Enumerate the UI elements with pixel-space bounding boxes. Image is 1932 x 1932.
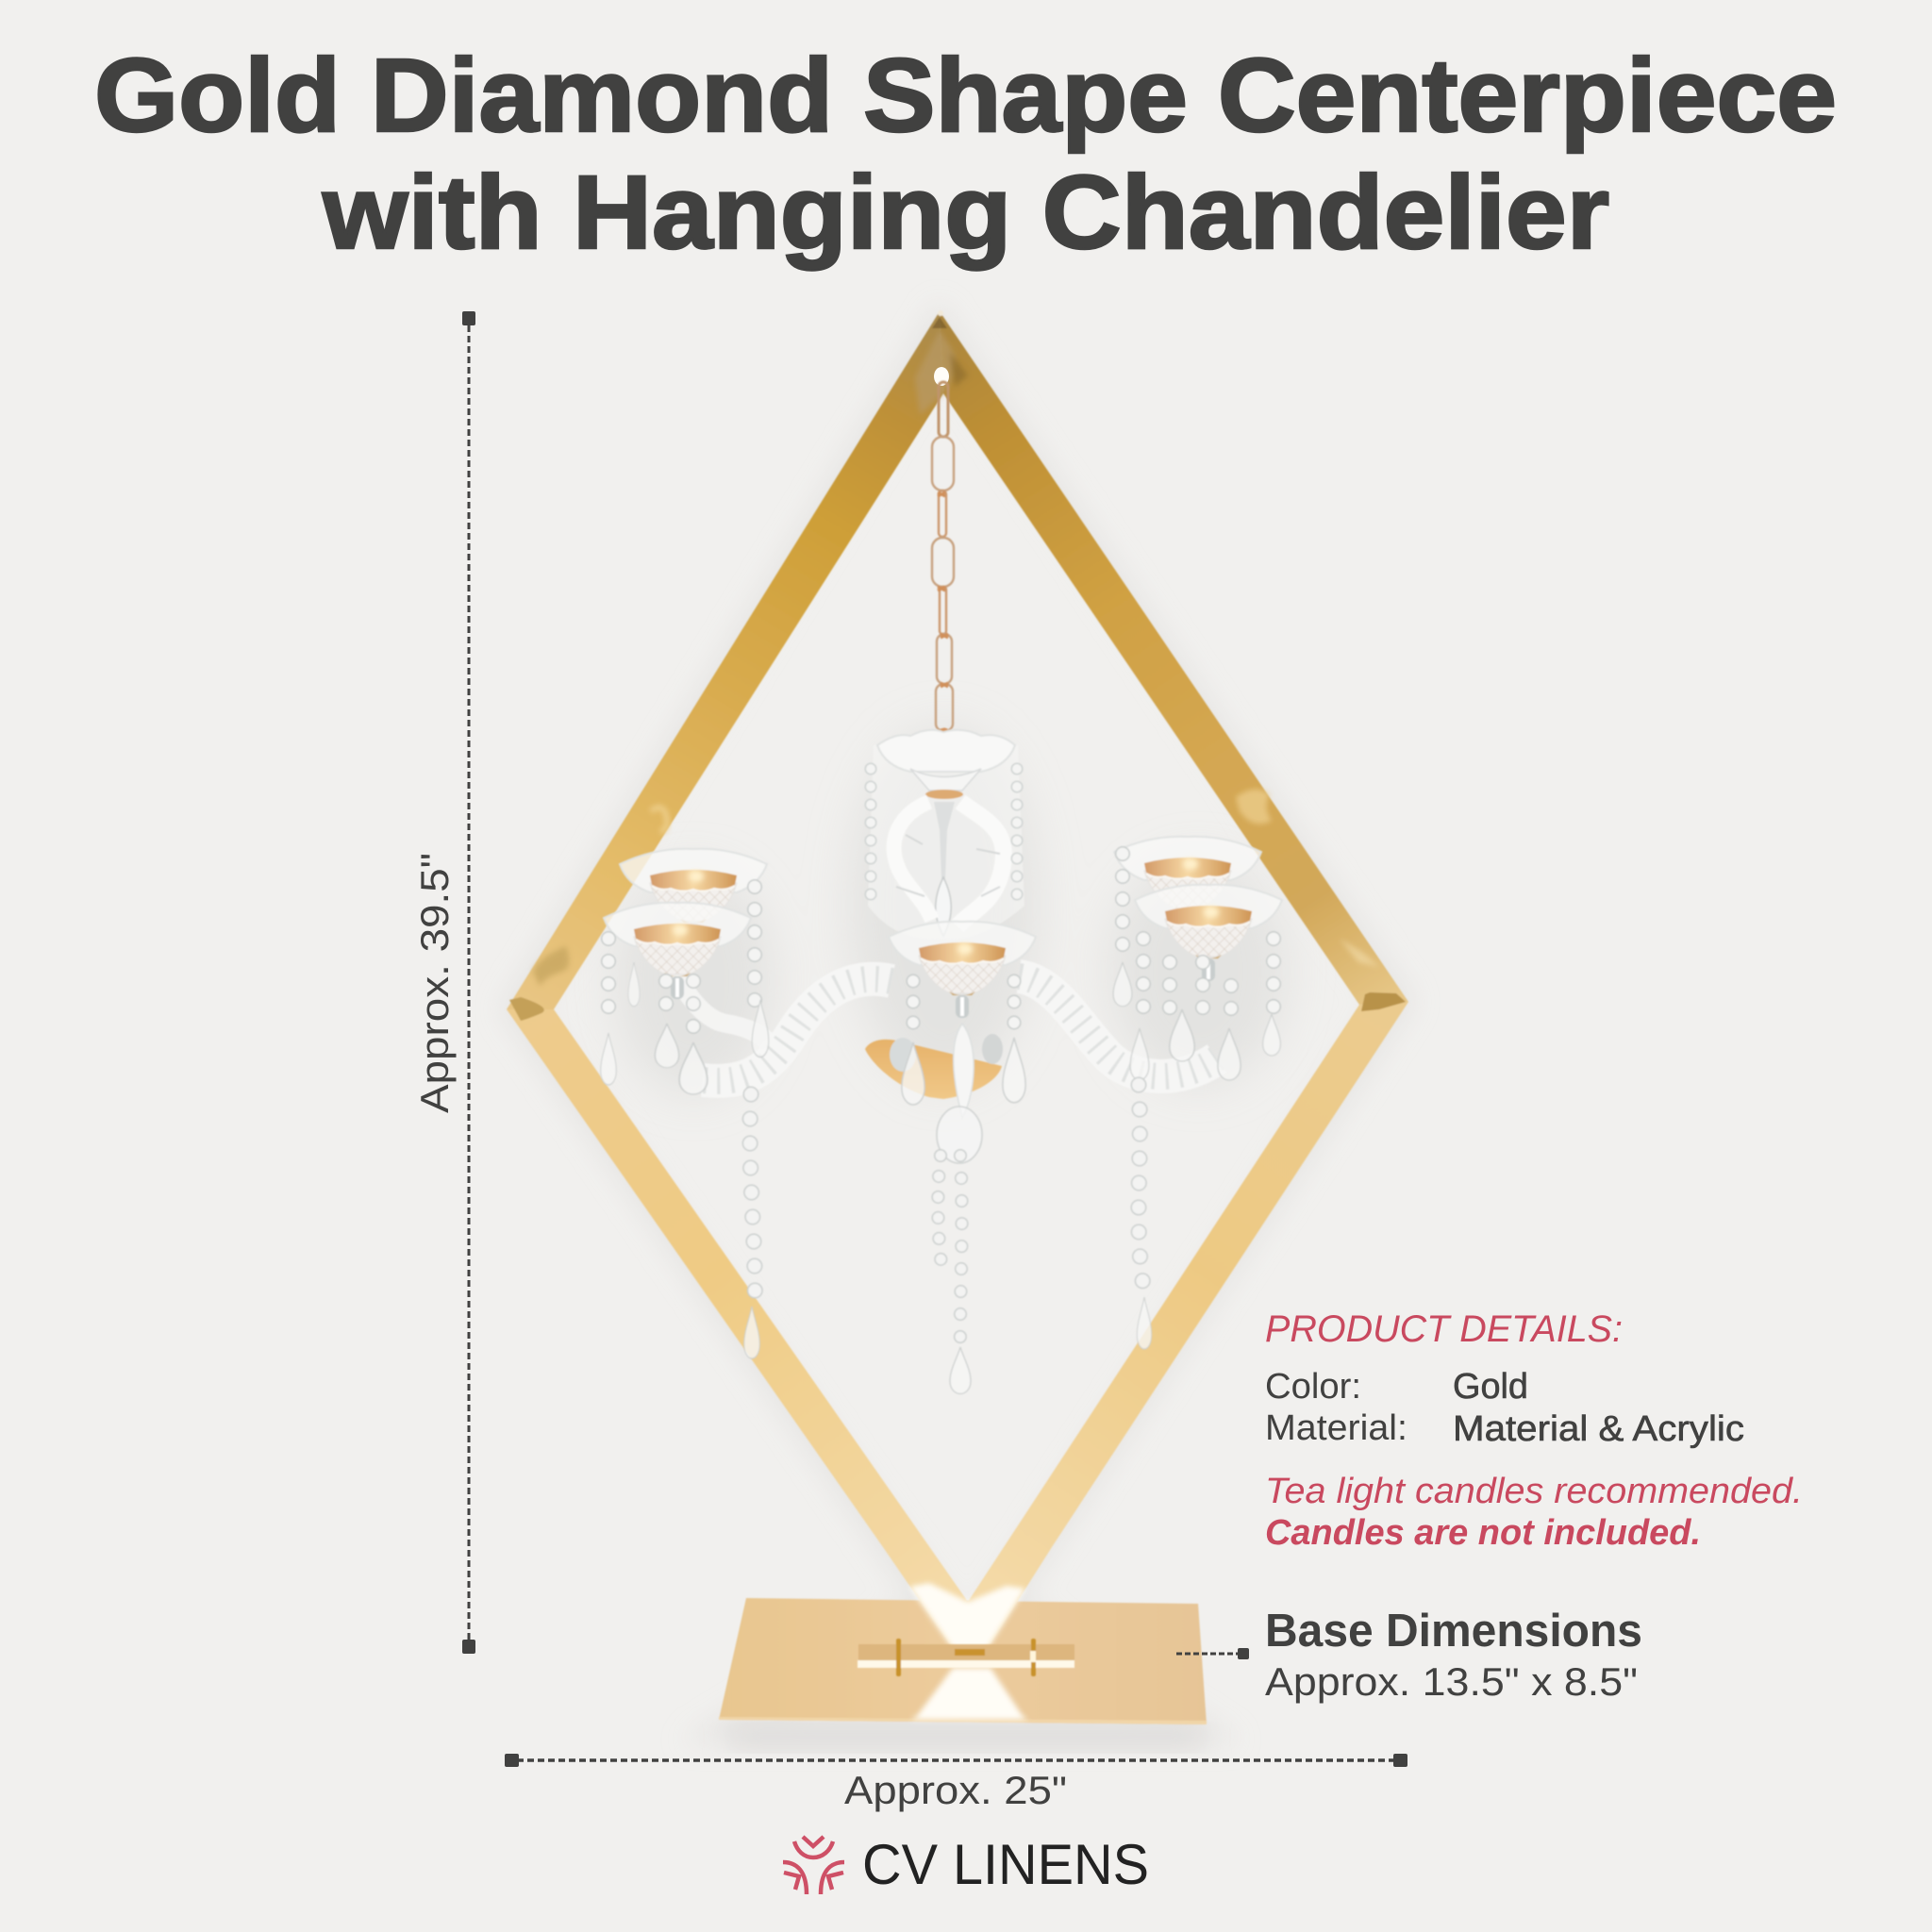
- lower left strip: [507, 1009, 985, 1653]
- brand logo: [783, 1833, 1149, 1896]
- spec rows: Material:: [1265, 1408, 1407, 1448]
- left arm: [703, 979, 891, 1081]
- right cups: [1113, 837, 1282, 1080]
- center front cup: [889, 922, 1036, 1163]
- height label: Approx. 39.5": [412, 853, 457, 1113]
- left vertex fold: [509, 997, 544, 1021]
- upper right strip: [940, 311, 1408, 1005]
- product details panel: [1265, 1308, 1803, 1553]
- base dimensions text: [1265, 1606, 1642, 1704]
- right vertex fold: [1361, 992, 1406, 1011]
- gold center dish: [865, 1034, 1003, 1099]
- wordmark: CV LINENS: [862, 1833, 1149, 1896]
- details heading: PRODUCT DETAILS:: [1265, 1308, 1623, 1350]
- title: Gold Diamond Shape Centerpiece: [94, 38, 1837, 154]
- base dimension leader: [1176, 1648, 1249, 1659]
- left cups: [601, 849, 769, 1094]
- title: [94, 38, 1837, 271]
- spec rows: [1265, 1367, 1744, 1449]
- candle note: [1265, 1472, 1803, 1553]
- height dimension line: [462, 311, 475, 1654]
- crystal chandelier: [601, 730, 1282, 1394]
- icon: logo mark: [783, 1837, 844, 1894]
- soft shadow behind product: [519, 330, 1396, 1726]
- long crystal strands: [750, 1085, 1145, 1344]
- right arm: [1019, 976, 1217, 1076]
- candle note: Tea light candles recommended.: [1265, 1472, 1803, 1511]
- width dimension line: [505, 1754, 1407, 1767]
- base reflection lower: [910, 1668, 1028, 1720]
- product photo: gold diamond centerpiece: [507, 310, 1408, 1749]
- hanging hole: [934, 367, 949, 386]
- spec rows: Color:: [1265, 1367, 1361, 1407]
- spec rows: Gold: [1453, 1367, 1528, 1407]
- weld marks on upper strips: [651, 808, 667, 832]
- base dimensions text: Base Dimensions: [1265, 1606, 1642, 1657]
- center back cup and column: [868, 730, 1024, 940]
- white glare at bottom of V: [909, 1583, 1025, 1653]
- base dimensions text: Approx. 13.5" x 8.5": [1265, 1659, 1638, 1704]
- apex patina: [915, 330, 955, 415]
- upper left strip: [507, 311, 943, 1009]
- candle note: Candles are not included.: [1265, 1513, 1701, 1553]
- diamond frame: [507, 310, 1408, 1653]
- hanging chain: [932, 382, 954, 755]
- spec rows: Material & Acrylic: [1453, 1409, 1744, 1449]
- lower right strip: [956, 1002, 1408, 1653]
- base plate: [719, 1598, 1207, 1749]
- title: with Hanging Chandelier: [322, 155, 1609, 271]
- shadow behind chandelier: [613, 726, 1288, 1094]
- width label: Approx. 25": [844, 1768, 1067, 1812]
- base bracket with bolts: [858, 1639, 1074, 1676]
